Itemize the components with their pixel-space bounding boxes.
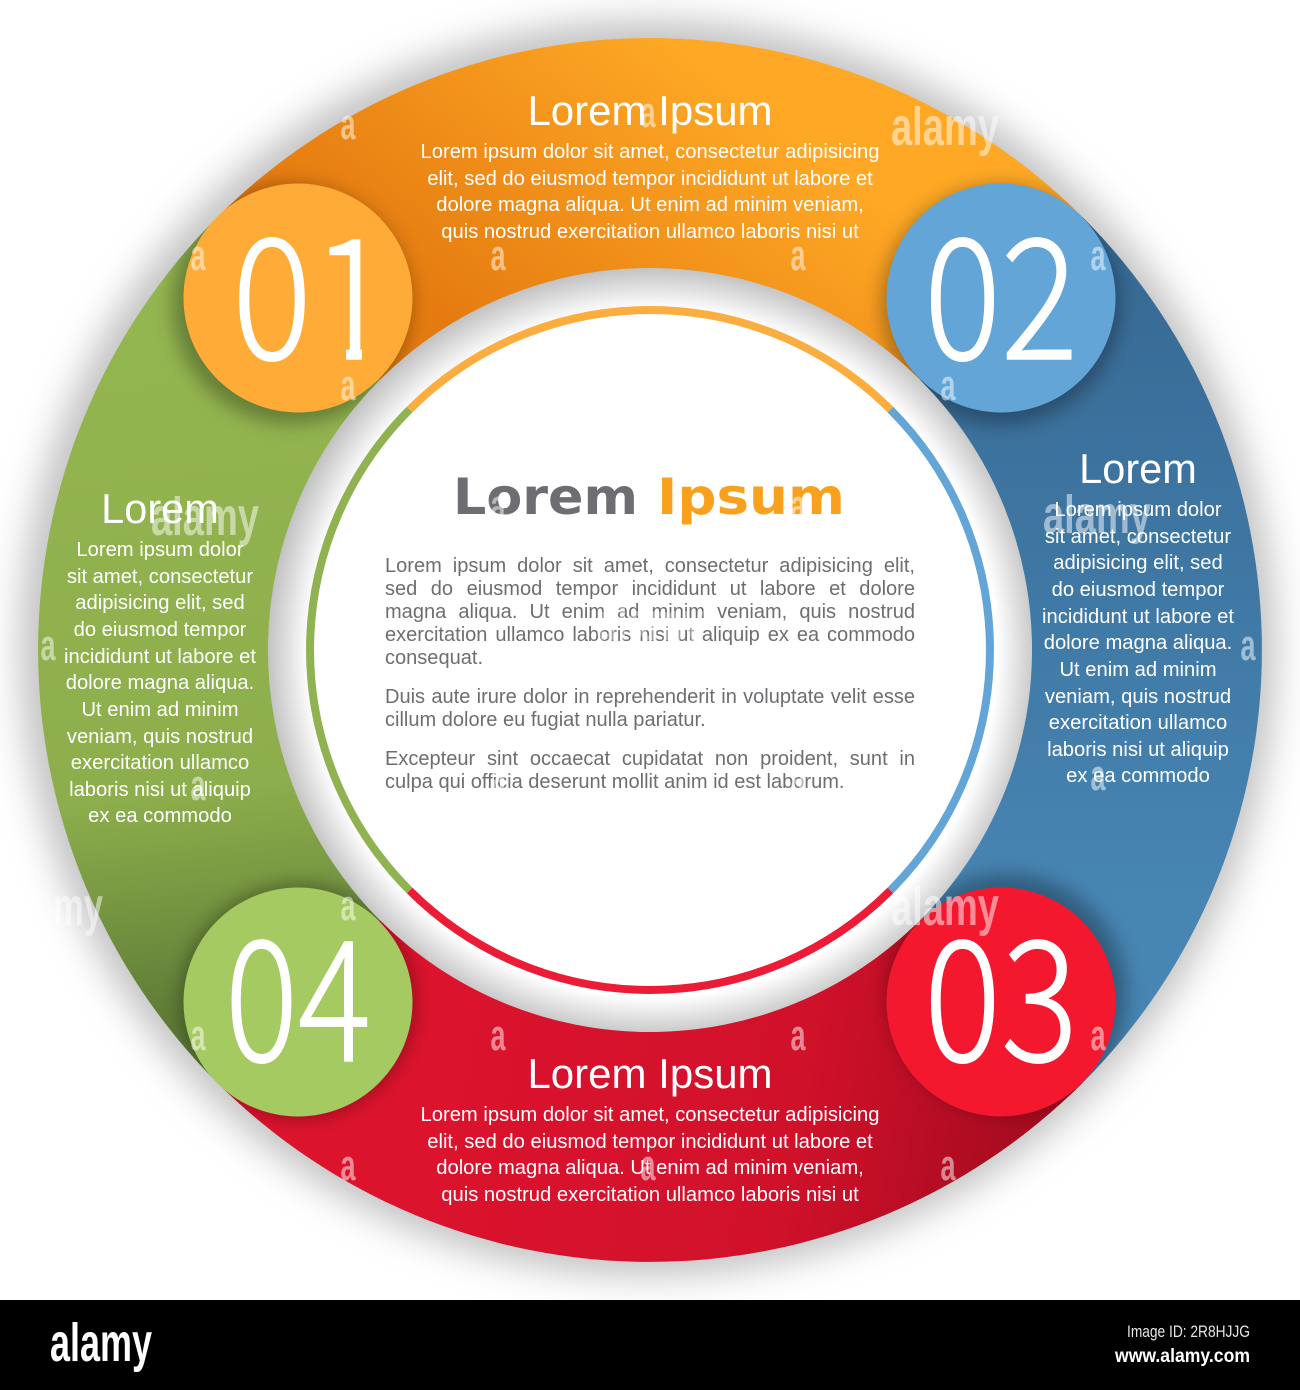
text block: red segment	[421, 1050, 879, 1206]
small watermark letters: a	[490, 231, 506, 280]
body: red segment: elit, sed do eiusmod tempor incididunt ut labore et	[427, 1131, 873, 1153]
paragraph 2: Duis aute irure dolor in reprehenderit in voluptate velit esse	[385, 686, 915, 708]
centre coloured outline	[310, 310, 990, 990]
body: blue segment: ex ea commodo	[1066, 765, 1210, 787]
number 02: 02	[924, 165, 1078, 408]
heading: red segment: Lorem Ipsum	[527, 1050, 773, 1097]
body: red segment: dolore magna aliqua. Ut enim ad minim veniam,	[436, 1157, 864, 1179]
paragraph 2	[385, 686, 915, 731]
segment: green	[38, 217, 380, 1083]
small watermark letters: a	[340, 1141, 356, 1190]
badge 03	[886, 867, 1116, 1116]
body: orange segment: quis nostrud exercitation ullamco laboris nisi ut	[441, 221, 859, 243]
number 01	[239, 237, 362, 362]
large watermark words	[53, 97, 1151, 937]
number 03: 03	[924, 867, 1078, 1110]
small watermark letters	[40, 88, 1256, 1190]
body: blue segment: exercitation ullamco	[1049, 712, 1227, 734]
small watermark letters: a	[640, 1141, 656, 1190]
centre title	[453, 468, 845, 526]
body: blue segment: do eiusmod tempor	[1052, 579, 1225, 601]
body: green segment: exercitation ullamco	[71, 752, 249, 774]
body: blue segment: veniam, quis nostrud	[1045, 686, 1231, 708]
small watermark letters: a	[1090, 1011, 1106, 1060]
small watermark letters: a	[1240, 621, 1256, 670]
small watermark letters: a	[490, 1011, 506, 1060]
centre disc with inner shading	[268, 268, 1032, 1032]
centre title: Lorem	[453, 468, 638, 526]
small watermark letters: a	[190, 761, 206, 810]
paragraph 1: consequat.	[385, 647, 483, 669]
paragraph 1: sed do eiusmod tempor incididunt ut labore et dolore	[385, 578, 915, 600]
body: blue segment: sit amet, consectetur	[1045, 526, 1231, 548]
watermark overlay	[40, 88, 1256, 1190]
small watermark letters: a	[490, 481, 506, 530]
body: red segment: Lorem ipsum dolor sit amet, consectetur adipisicing	[421, 1104, 879, 1126]
body: green segment: adipisicing elit, sed	[75, 592, 245, 614]
text block: green segment	[64, 485, 256, 827]
small watermark letters: a	[340, 881, 356, 930]
body: orange segment	[421, 141, 879, 243]
small watermark letters: a	[40, 621, 56, 670]
body: orange segment: Lorem ipsum dolor sit amet, consectetur adipisicing	[421, 141, 879, 163]
text block: blue segment	[1042, 445, 1234, 787]
segment: orange	[217, 38, 1083, 380]
body: red segment	[421, 1104, 879, 1206]
small watermark letters: a	[490, 754, 506, 803]
arc: orange	[410, 310, 890, 410]
heading: blue segment: Lorem	[1079, 445, 1197, 492]
small watermark letters: a	[1090, 231, 1106, 280]
small watermark letters: a	[790, 754, 806, 803]
segment: blue	[920, 217, 1262, 1083]
paragraph 1	[385, 554, 915, 669]
small watermark letters: a	[640, 88, 656, 137]
small watermark letters: a	[790, 231, 806, 280]
body: green segment: sit amet, consectetur	[67, 566, 253, 588]
body: green segment	[64, 539, 256, 827]
paragraph 2: cillum dolore eu fugiat nulla pariatur.	[385, 709, 706, 731]
body: green segment: laboris nisi ut aliquip	[69, 779, 251, 801]
small watermark letters: a	[190, 1011, 206, 1060]
number 04: 04	[225, 867, 371, 1110]
badge 04	[184, 867, 412, 1116]
badge 02	[886, 165, 1116, 412]
body: orange segment: dolore magna aliqua. Ut enim ad minim veniam,	[436, 194, 864, 216]
centre body text	[385, 554, 915, 793]
body: blue segment: dolore magna aliqua.	[1044, 632, 1232, 654]
paragraph 3: Excepteur sint occaecat cupidatat non proident, sunt in	[385, 748, 915, 770]
small watermark letters: a	[790, 481, 806, 530]
body: green segment: ex ea commodo	[88, 805, 232, 827]
image id: Image ID: 2R8HJJG	[1127, 1322, 1250, 1341]
segment: red	[217, 920, 1083, 1262]
small watermark letters: a	[790, 1011, 806, 1060]
small watermark letters: a	[340, 100, 356, 149]
body: green segment: do eiusmod tempor	[74, 619, 247, 641]
small watermark letters: a	[1090, 751, 1106, 800]
large watermark words: alamy	[596, 592, 704, 652]
footer logo: alamy	[50, 1313, 152, 1373]
body: green segment: Lorem ipsum dolor	[76, 539, 244, 561]
small watermark letters: a	[340, 361, 356, 410]
website: www.alamy.com	[1114, 1346, 1250, 1367]
paragraph 3: culpa qui officia deserunt mollit anim id est laborum.	[385, 771, 844, 793]
body: green segment: Ut enim ad minim	[81, 699, 239, 721]
body: blue segment: Lorem ipsum dolor	[1054, 499, 1222, 521]
small watermark letters: a	[940, 361, 956, 410]
text block: orange segment	[421, 87, 879, 243]
body: green segment: veniam, quis nostrud	[67, 726, 253, 748]
number 01: 1	[310, 165, 394, 408]
large watermark words: alamy	[151, 487, 259, 547]
body: green segment: incididunt ut labore et	[64, 646, 256, 668]
paragraph 1: exercitation ullamco laboris nisi ut aliquip ex ea commodo	[385, 624, 915, 646]
body: blue segment: Ut enim ad minim	[1059, 659, 1217, 681]
body: blue segment: adipisicing elit, sed	[1053, 552, 1223, 574]
large watermark words: alamy	[1043, 485, 1151, 545]
arc: green	[310, 410, 410, 890]
paragraph 1: magna aliqua. Ut enim ad minim veniam, quis nostrud	[385, 601, 915, 623]
paragraph 1: Lorem ipsum dolor sit amet, consectetur adipisicing elit,	[385, 554, 915, 576]
body: blue segment: incididunt ut labore et	[1042, 606, 1234, 628]
badge shadows	[172, 184, 1127, 1119]
small watermark letters: a	[940, 1141, 956, 1190]
body: blue segment	[1042, 499, 1234, 787]
small watermark letters: a	[190, 231, 206, 280]
large watermark words: alamy	[891, 877, 999, 937]
footer bar	[0, 1300, 1300, 1390]
number 01: 0	[232, 165, 312, 408]
large watermark words: my	[53, 877, 103, 937]
body: blue segment: laboris nisi ut aliquip	[1047, 739, 1229, 761]
badge 01	[184, 165, 412, 412]
body: red segment: quis nostrud exercitation ullamco laboris nisi ut	[441, 1184, 859, 1206]
large watermark words: alamy	[891, 97, 999, 157]
centre title: Ipsum	[657, 468, 845, 526]
body: orange segment: elit, sed do eiusmod tempor incididunt ut labore et	[427, 168, 873, 190]
body: green segment: dolore magna aliqua.	[66, 672, 254, 694]
heading: orange segment: Lorem Ipsum	[527, 87, 773, 134]
arc: blue	[890, 410, 990, 890]
paragraph 3	[385, 748, 915, 793]
heading: green segment: Lorem	[101, 485, 219, 532]
arc: red	[410, 890, 890, 990]
